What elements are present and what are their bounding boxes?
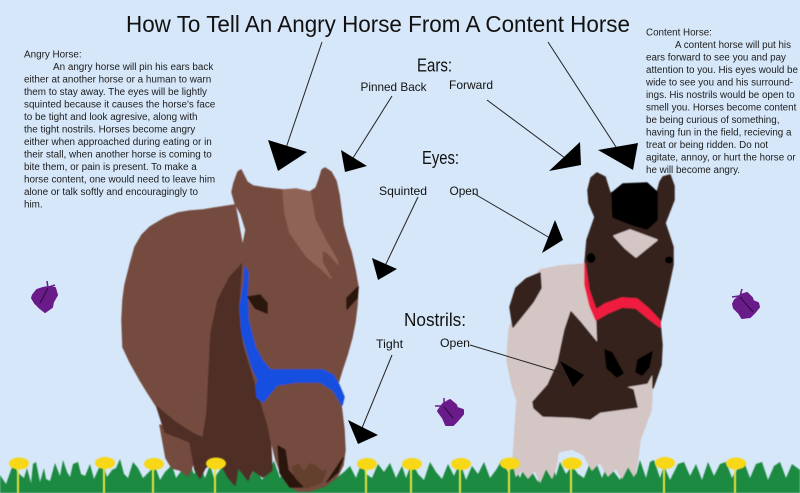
text block: angry horse: their stall, when another horse is coming to <box>24 150 212 160</box>
pinto head <box>585 173 674 388</box>
arrow: forward <box>487 100 581 171</box>
text block: angry horse: him. <box>24 200 43 210</box>
flower <box>95 457 115 493</box>
text block: angry horse: either when approached during eating or in <box>24 137 212 148</box>
text block: angry horse: bite them, or pain is present. To make a <box>24 162 197 173</box>
text block: angry horse: squinted because it causes the horse's face <box>24 100 216 110</box>
brown angry horse <box>122 168 358 491</box>
grass strip <box>0 459 800 493</box>
text block: angry horse: horse content, one would need to leave him <box>24 174 215 186</box>
butterfly left <box>32 281 57 312</box>
brown horse front leg <box>160 425 194 476</box>
text block: content horse: he will become angry. <box>646 165 740 176</box>
brown horse right eye <box>347 287 358 309</box>
arrow: open eyes <box>473 193 563 253</box>
flower <box>357 458 377 493</box>
label: tight: Tight <box>376 337 404 351</box>
title: How To Tell An Angry Horse From A Content Horse <box>126 11 630 37</box>
arrow: squinted <box>372 197 418 280</box>
brown horse muzzle shading <box>292 464 326 488</box>
brown horse forelock <box>283 189 338 278</box>
text block: angry horse: An angry horse will pin his ears back <box>53 62 213 73</box>
arrow: tight <box>348 355 392 444</box>
pinto left nostril <box>605 350 623 377</box>
pinto white star <box>614 230 657 257</box>
pinto body <box>507 264 653 482</box>
pinto shoulder patch <box>510 273 541 327</box>
flower <box>9 458 29 493</box>
flower <box>206 458 226 493</box>
text block: content horse: A content horse will put his <box>675 40 791 51</box>
text block: content horse: wide to see you and his surround- <box>645 78 793 88</box>
heading: ears: Ears: <box>417 56 452 76</box>
heading: nostrils: Nostrils: <box>404 310 466 330</box>
brown horse left eye <box>248 295 267 313</box>
flower <box>402 458 422 493</box>
text block: angry horse: them to stay away. The eyes will be lightly <box>24 87 207 98</box>
text block: content horse: treat or being ridden. Do not <box>646 140 768 151</box>
text block: angry horse: to be tight and look agresive, along with <box>24 112 197 123</box>
label: forward: Forward <box>449 78 493 92</box>
brown horse head <box>232 168 358 491</box>
pinto right nostril <box>636 352 652 375</box>
flower <box>726 458 746 493</box>
pinto forelock <box>612 183 657 229</box>
arrow: pinned back <box>341 96 392 172</box>
blue halter <box>240 267 344 405</box>
brown horse body <box>122 205 245 438</box>
text block: angry horse: Angry Horse: <box>24 50 82 60</box>
text block: content horse: attention to you. His eyes would be <box>646 65 798 76</box>
text block: content horse: having fun in the field, recieving a <box>646 128 792 138</box>
pinto right eye <box>665 256 673 264</box>
brown horse left nostril <box>278 446 303 487</box>
pinto content horse <box>507 173 674 482</box>
butterfly right <box>732 289 759 318</box>
label: open nostrils: Open <box>440 336 470 350</box>
label: open eyes: Open <box>450 184 478 198</box>
flower <box>500 458 520 493</box>
flower <box>144 458 164 493</box>
red halter <box>585 263 660 327</box>
text block: content horse: ears forward to see you and pay <box>646 52 786 64</box>
pinto left eye <box>586 253 596 263</box>
flower <box>451 458 471 493</box>
arrow: title to content horse <box>548 42 638 170</box>
pinto chest patch <box>533 312 637 419</box>
text block: angry horse: either at another horse or a human to warn <box>24 74 211 86</box>
heading: eyes: Eyes: <box>422 148 459 168</box>
label: squinted: Squinted <box>379 184 427 198</box>
arrow: title to angry horse <box>268 42 322 171</box>
text block: content horse: Content Horse: <box>646 28 712 38</box>
brown horse right nostril <box>327 458 343 482</box>
text block: content horse: be being curious of something, <box>646 115 779 126</box>
yellow flowers <box>9 457 746 493</box>
text block: angry horse: alone or talk softly and encouragingly to <box>24 187 199 198</box>
text block: content horse: ings. His nostrils would be open to <box>646 90 795 101</box>
label: pinned back: Pinned Back <box>360 80 427 94</box>
text block: content horse: smell you. Horses become content <box>646 102 797 114</box>
butterfly centre <box>435 398 463 425</box>
text block: angry horse: the tight nostrils. Horses become angry <box>24 124 195 136</box>
text block: content horse: agitate, annoy, or hurt the horse or <box>646 152 796 164</box>
flower <box>655 457 675 493</box>
flower <box>562 458 582 493</box>
brown horse neck shadow <box>157 263 272 485</box>
arrow: open nostrils <box>470 345 584 387</box>
